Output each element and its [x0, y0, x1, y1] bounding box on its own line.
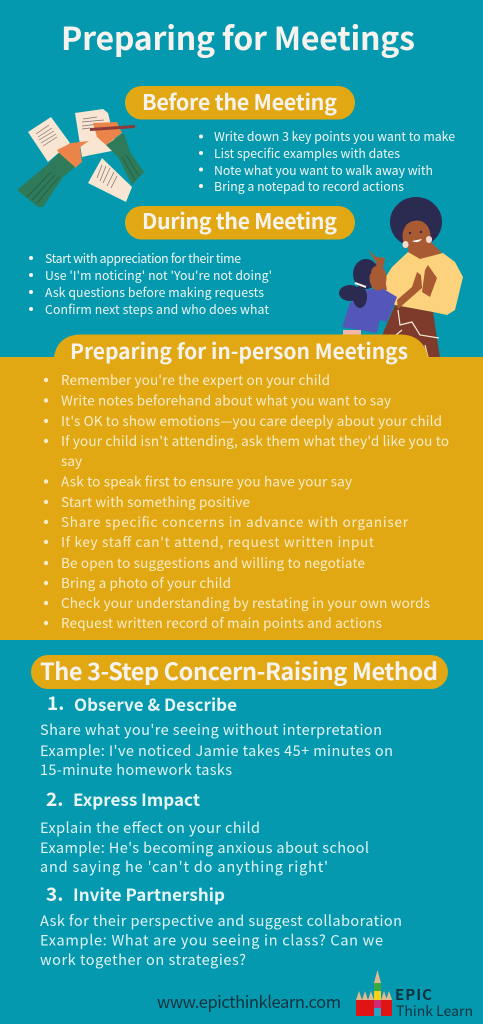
bullet list: before the meeting: List specific examples with dates	[214, 144, 400, 162]
bullet list: during the meeting: Ask questions before making requests	[45, 283, 264, 301]
website url: www.epicthinklearn.com	[157, 989, 341, 1013]
heading: preparing for in-person meetings: Preparing for in-person Meetings	[70, 336, 408, 366]
bullet dots	[44, 378, 48, 625]
logo: epic think learn: Think Learn	[396, 1001, 473, 1021]
step 1: observe and describe: 15-minute homework tasks	[40, 759, 232, 780]
step 1: observe and describe	[40, 689, 393, 780]
step 2: express impact	[40, 785, 369, 877]
bullet list: before the meeting: Bring a notepad to record actions	[214, 177, 404, 195]
step 1: observe and describe: Observe & Describe	[74, 691, 237, 716]
bullet list: in-person tips: Share specific concerns in advance with organiser	[61, 511, 409, 531]
logo: epic think learn: EPIC	[395, 984, 432, 1005]
illustration: hands writing on papers	[17, 109, 144, 207]
bullet list: in-person tips: Bring a photo of your child	[61, 572, 231, 592]
bullet list: in-person tips: Be open to suggestions and willing to negotiate	[61, 552, 365, 572]
bullet list: before the meeting	[199, 127, 455, 195]
step 2: express impact: and saying he 'can't do anything right'	[40, 856, 328, 877]
bullet list: in-person tips: It's OK to show emotions—you care deeply about your child	[61, 410, 442, 430]
step 3: invite partnership: work together on strategies?	[40, 949, 246, 970]
step 3: invite partnership: 3.	[46, 880, 63, 907]
step 2: express impact: 2.	[46, 785, 63, 812]
bullet list: in-person tips: If your child isn't attending, ask them what they'd like you to	[61, 430, 449, 450]
bullet list: in-person tips: Request written record of main points and actions	[61, 612, 382, 632]
step 3: invite partnership	[40, 880, 402, 970]
step 2: express impact: Explain the effect on your child	[40, 817, 260, 838]
step 1: observe and describe: Share what you're seeing without interpretation	[40, 719, 382, 740]
bullet list: in-person tips: Ask to speak first to ensure you have your say	[61, 470, 352, 490]
bullet list: during the meeting: Confirm next steps and who does what	[45, 300, 269, 318]
step 3: invite partnership: Ask for their perspective and suggest collaboration	[40, 910, 402, 931]
step 1: observe and describe: 1.	[47, 689, 64, 716]
bullet list: during the meeting: Use 'I'm noticing' not 'You're not doing'	[45, 266, 272, 284]
step 3: invite partnership: Invite Partnership	[73, 881, 225, 906]
bullet list: in-person tips	[61, 369, 449, 632]
panel: preparing for in-person meetings	[0, 334, 483, 640]
bullet list: in-person tips: say	[61, 450, 82, 470]
bullet list: in-person tips: Remember you're the expert on your child	[61, 369, 330, 389]
step 2: express impact: Express Impact	[73, 786, 200, 811]
bullet list: before the meeting: Write down 3 key points you want to make	[214, 127, 455, 145]
step 1: observe and describe: Example: I've noticed Jamie takes 45+ minutes on	[40, 740, 393, 761]
bullet list: in-person tips: Write notes beforehand about what you want to say	[61, 390, 391, 410]
bullet list: before the meeting: Note what you want to walk away with	[214, 161, 433, 179]
bullet list: during the meeting: Start with appreciation for their time	[45, 249, 241, 267]
heading: the 3-step concern-raising method: The 3-Step Concern-Raising Method	[40, 653, 438, 687]
step 3: invite partnership: Example: What are you seeing in class? Can we	[40, 930, 383, 950]
title: Preparing for Meetings	[61, 14, 415, 60]
logo: epic think learn	[356, 970, 473, 1021]
illustration: mother and child high five	[339, 197, 463, 358]
step 2: express impact: Example: He's becoming anxious about school	[40, 837, 369, 858]
bullet list: in-person tips: Start with something positive	[61, 491, 250, 511]
bullet list: in-person tips: If key staff can't attend, request written input	[61, 531, 374, 551]
heading: before the meeting: Before the Meeting	[142, 86, 337, 117]
heading: during the meeting: During the Meeting	[142, 205, 337, 236]
bullet list: in-person tips: Check your understanding by restating in your own words	[61, 592, 430, 612]
bullet list: during the meeting	[29, 249, 272, 318]
